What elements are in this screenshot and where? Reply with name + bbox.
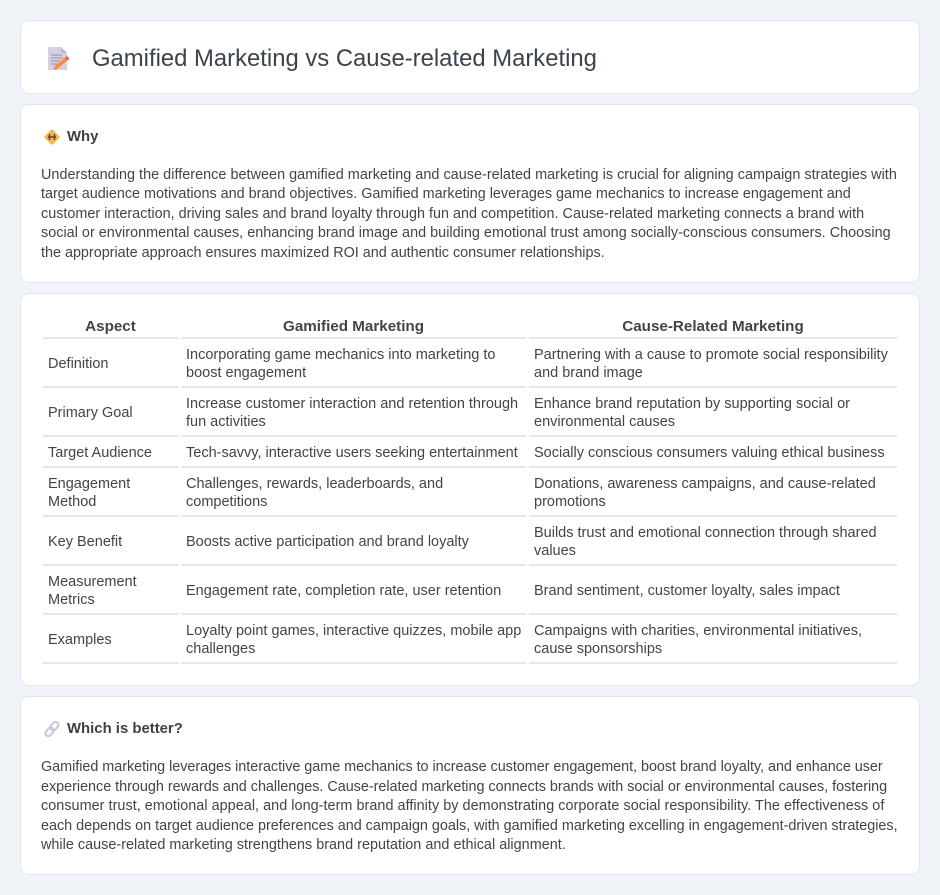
- text block: which is better: [41, 759, 898, 853]
- cell: examples gamified: Loyalty point games, interactive quizzes, mobile app: [186, 623, 521, 639]
- text block: which is better: experience through rewards and challenges. Cause-related marketing connects brands with social or environmental causes, fostering: [41, 779, 887, 795]
- panel: comparison table: [20, 293, 920, 686]
- row: engagement method: Method: [48, 494, 96, 510]
- text block: why: Understanding the difference between gamified marketing and cause-related marketing is crucial for aligning campaign strategies with: [41, 167, 897, 183]
- cell: audience cause: Socially conscious consumers valuing ethical business: [534, 445, 885, 461]
- table header: aspect: Aspect: [85, 318, 136, 335]
- cell: examples cause: Campaigns with charities, environmental initiatives,: [534, 623, 862, 639]
- cell: metrics cause: Brand sentiment, customer loyalty, sales impact: [534, 583, 840, 599]
- cell: benefit gamified: Boosts active participation and brand loyalty: [186, 534, 469, 550]
- row: engagement method: [48, 476, 130, 510]
- row: engagement method: Engagement: [48, 476, 130, 492]
- text block: why: customer interaction, driving sales and brand loyalty through fun and competition. Cause-related marketing connects a brand with: [41, 206, 864, 222]
- table header: cause-related marketing: Cause-Related Marketing: [622, 318, 804, 335]
- cell: audience gamified: Tech-savvy, interactive users seeking entertainment: [186, 445, 518, 461]
- text block: why: target audience motivations and brand objectives. Gamified marketing leverages game mechanics to increase engagement and: [41, 186, 851, 202]
- cell: method cause: promotions: [534, 494, 606, 510]
- cell: goal cause: Enhance brand reputation by supporting social or: [534, 396, 850, 412]
- text block: which is better: consumer trust, emotional appeal, and long-term brand affinity by demonstrating corporate social responsibility. The effectiveness of: [41, 798, 884, 814]
- panel: which is better: [20, 696, 920, 875]
- cell: method gamified: Challenges, rewards, leaderboards, and: [186, 476, 443, 492]
- table header: gamified marketing: [181, 318, 526, 339]
- cell: definition cause: and brand image: [534, 365, 643, 381]
- text block: which is better: Gamified marketing leverages interactive game mechanics to increase customer engagement, boost brand loyalty, and enhance user: [41, 759, 883, 775]
- cell: definition cause: Partnering with a cause to promote social responsibility: [534, 347, 888, 363]
- row: measurement metrics: Metrics: [48, 592, 95, 608]
- cell: examples cause: cause sponsorships: [534, 641, 662, 657]
- row: measurement metrics: Measurement: [48, 574, 137, 590]
- cell: definition gamified: boost engagement: [186, 365, 306, 381]
- panel: why: [20, 104, 920, 283]
- cell: examples cause: [534, 623, 862, 657]
- cell: method gamified: [186, 476, 443, 510]
- title: Gamified Marketing vs Cause-related Marketing: [92, 45, 597, 72]
- icon: document with pencil: [48, 47, 70, 70]
- text block: which is better: while cause-related marketing strengthens brand reputation and ethical alignment.: [41, 837, 566, 853]
- cell: method cause: [534, 476, 876, 510]
- cell: definition gamified: Incorporating game mechanics into marketing to: [186, 347, 496, 363]
- text block: why: social or environmental causes, enhancing brand image and building emotional trust among socially-conscious consumers. Choosing: [41, 225, 891, 241]
- table header: aspect: [43, 318, 178, 339]
- cell: metrics gamified: Engagement rate, completion rate, user retention: [186, 583, 501, 599]
- icon: warning diamond: [44, 129, 60, 145]
- cell: examples gamified: [186, 623, 521, 657]
- cell: examples gamified: challenges: [186, 641, 255, 657]
- heading: why: Why: [67, 129, 98, 145]
- heading: which is better: Which is better?: [67, 721, 183, 737]
- cell: benefit cause: Builds trust and emotional connection through shared: [534, 525, 877, 541]
- cell: method cause: Donations, awareness campaigns, and cause-related: [534, 476, 876, 492]
- row: primary goal: Primary Goal: [48, 405, 133, 421]
- table header: gamified marketing: Gamified Marketing: [283, 318, 424, 335]
- row: definition: Definition: [48, 356, 108, 372]
- cell: method gamified: competitions: [186, 494, 267, 510]
- icon: chain link: [44, 721, 60, 737]
- row: target audience: Target Audience: [48, 445, 152, 461]
- row: measurement metrics: [48, 574, 137, 608]
- cell: benefit cause: values: [534, 543, 576, 559]
- cell: goal cause: environmental causes: [534, 414, 675, 430]
- cell: definition gamified: [186, 347, 496, 381]
- cell: goal gamified: fun activities: [186, 414, 266, 430]
- panel: title card: [20, 20, 920, 94]
- cell: goal gamified: Increase customer interaction and retention through: [186, 396, 518, 412]
- text block: why: [41, 167, 897, 261]
- cell: goal gamified: [186, 396, 518, 430]
- table header: cause-related marketing: [529, 318, 897, 339]
- text block: why: the appropriate approach ensures maximized ROI and authentic consumer relationships.: [41, 245, 605, 261]
- row: key benefit: Key Benefit: [48, 534, 122, 550]
- text block: which is better: each depends on target audience preferences and campaign goals, with gamified marketing excelling in engagement-driven strategies,: [41, 818, 898, 834]
- row: examples: Examples: [48, 632, 112, 648]
- cell: benefit cause: [534, 525, 877, 559]
- cell: goal cause: [534, 396, 850, 430]
- cell: definition cause: [534, 347, 888, 381]
